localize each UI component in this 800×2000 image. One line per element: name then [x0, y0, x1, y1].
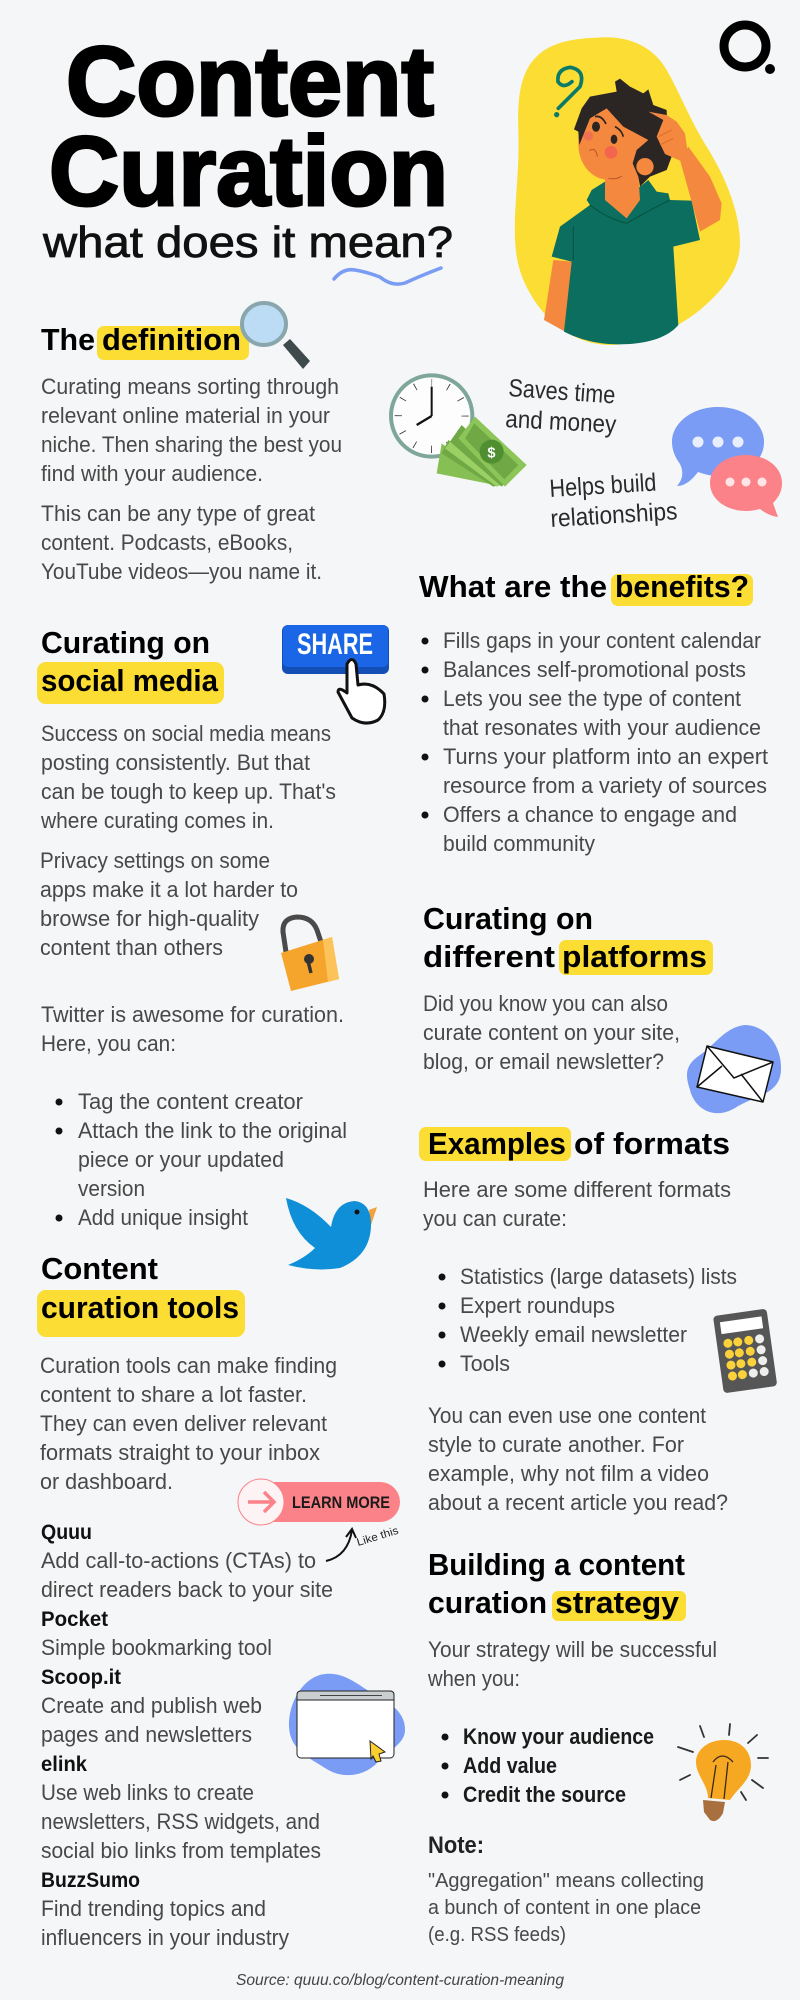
- list: benefits: Turns your platform into an expert: [443, 744, 768, 769]
- heading: curation tools: Content: [41, 1251, 158, 1286]
- text block: privacy: apps make it a lot harder to: [40, 877, 298, 902]
- heading: curation tools: [37, 1251, 245, 1337]
- text block: twitter: Here, you can:: [41, 1031, 176, 1056]
- text block: platforms: [423, 991, 680, 1074]
- heading: social media: social media: [41, 663, 219, 698]
- list: tools: social bio links from templates: [41, 1838, 321, 1863]
- list: strategy: [442, 1724, 654, 1807]
- heading: benefits: [419, 569, 753, 606]
- text block: definition: content. Podcasts, eBooks,: [41, 530, 293, 555]
- heading: strategy: strategy: [555, 1585, 680, 1620]
- list: tools: elink: [41, 1753, 87, 1776]
- text block: platforms: curate content on your site,: [423, 1020, 680, 1045]
- icon: light bulb: [678, 1724, 768, 1821]
- heading: examples: Examples: [428, 1126, 566, 1161]
- subtitle: what does it mean?: [42, 218, 453, 267]
- list: formats: [438, 1264, 737, 1376]
- text block: curation tools intro: content to share a lot faster.: [40, 1382, 307, 1407]
- list: tools: direct readers back to your site: [41, 1577, 333, 1602]
- text block: twitter: [41, 1002, 344, 1056]
- list: tools: Simple bookmarking tool: [41, 1635, 272, 1660]
- icon: padlock: [281, 917, 339, 991]
- text block: privacy: [40, 848, 298, 960]
- text block: formats intro: [423, 1177, 731, 1231]
- list: tools: Add call-to-actions (CTAs) to: [41, 1548, 316, 1573]
- icon: clock and money: $: [487, 445, 495, 461]
- heading: strategy: [428, 1547, 686, 1621]
- heading: benefits: What are the: [419, 569, 607, 604]
- text block: formats outro: style to curate another. For: [428, 1432, 684, 1457]
- heading: curation tools: curation tools: [41, 1290, 239, 1325]
- icon: bird: [286, 1198, 377, 1269]
- source footer: Source: quuu.co/blog/content-curation-meaning: [236, 1972, 564, 1989]
- list: tools: influencers in your industry: [41, 1925, 289, 1950]
- text block: strategy intro: when you:: [427, 1666, 520, 1691]
- text block: curation tools intro: or dashboard.: [40, 1469, 173, 1494]
- benefit label: helps build relationships: relationships: [550, 497, 678, 533]
- text block: definition: find with your audience.: [41, 461, 263, 486]
- panel: definition: [41, 303, 342, 584]
- list: twitter: version: [78, 1176, 145, 1201]
- text block: privacy: content than others: [40, 935, 223, 960]
- title: Curation: [49, 116, 448, 226]
- text block: definition: relevant online material in your: [41, 403, 330, 428]
- panel: benefits: [419, 569, 768, 856]
- note: "Aggregation" means collecting: [428, 1870, 704, 1892]
- heading: platforms: platforms: [562, 939, 707, 974]
- text block: formats outro: example, why not film a video: [428, 1461, 709, 1486]
- text block: formats intro: Here are some different formats: [423, 1177, 731, 1202]
- list: strategy: Credit the source: [463, 1782, 626, 1807]
- text block: social media: can be tough to keep up. That's: [41, 779, 336, 804]
- list: benefits: resource from a variety of sources: [443, 773, 767, 798]
- list: tools: Use web links to create: [41, 1780, 254, 1805]
- note: [428, 1832, 704, 1946]
- button: learn more: LEARN MORE: [292, 1493, 390, 1512]
- heading: benefits: benefits?: [615, 569, 749, 604]
- note: (e.g. RSS feeds): [428, 1924, 566, 1946]
- list: formats: Expert roundups: [460, 1293, 615, 1318]
- heading: platforms: different: [423, 939, 555, 974]
- list: tools: pages and newsletters: [41, 1722, 252, 1747]
- icon: magnifying glass: [242, 303, 310, 369]
- heading: strategy: Building a content: [428, 1547, 685, 1582]
- text block: privacy: browse for high-quality: [40, 906, 259, 931]
- benefit label: helps build relationships: [549, 469, 678, 533]
- illustration: confused person: [515, 37, 740, 345]
- icon: clock and money: [391, 375, 527, 487]
- title: [49, 26, 448, 226]
- list: tools: Find trending topics and: [41, 1896, 266, 1921]
- text block: definition: niche. Then sharing the best you: [41, 432, 342, 457]
- text block: formats intro: you can curate:: [423, 1206, 567, 1231]
- icon: share button: [282, 625, 389, 723]
- list: tools: Pocket: [41, 1608, 108, 1631]
- text block: curation tools intro: They can even deliver relevant: [40, 1411, 327, 1436]
- text block: platforms: blog, or email newsletter?: [423, 1049, 664, 1074]
- text block: social media: where curating comes in.: [40, 808, 274, 833]
- list: benefits: Offers a chance to engage and: [443, 802, 737, 827]
- heading: social media: Curating on: [41, 625, 210, 660]
- benefit label: saves time and money: and money: [505, 405, 617, 439]
- benefit label: saves time and money: Saves time: [508, 374, 616, 409]
- heading: the definition: definition: [102, 322, 241, 357]
- icon: envelope: [687, 1025, 781, 1113]
- text block: curation tools intro: Curation tools can make finding: [40, 1353, 337, 1378]
- heading: platforms: Curating on: [423, 901, 593, 936]
- list: twitter: Attach the link to the original: [78, 1118, 347, 1143]
- list: twitter: Tag the content creator: [78, 1089, 303, 1114]
- list: strategy: Add value: [463, 1753, 557, 1778]
- list: formats: Weekly email newsletter: [460, 1322, 687, 1347]
- heading: social media: [37, 625, 224, 704]
- benefit label: saves time and money: [505, 374, 617, 439]
- heading: the definition: [41, 322, 249, 360]
- subtitle: [42, 218, 453, 284]
- text block: formats outro: You can even use one content: [428, 1403, 706, 1428]
- arrow: like this: Like this: [355, 1525, 401, 1549]
- text block: privacy: Privacy settings on some: [40, 848, 270, 873]
- list: formats: Statistics (large datasets) lists: [460, 1264, 737, 1289]
- text block: strategy intro: Your strategy will be successful: [428, 1637, 717, 1662]
- heading: examples: [419, 1126, 730, 1161]
- text block: strategy intro: [427, 1637, 717, 1691]
- icon: chat bubbles: [672, 407, 782, 517]
- list: tools: BuzzSumo: [41, 1869, 140, 1892]
- panel: curating on social media: [37, 625, 389, 1269]
- list: formats: Tools: [460, 1351, 510, 1376]
- arrow: like this: [326, 1525, 401, 1561]
- text block: definition: This can be any type of great: [41, 501, 315, 526]
- list: benefits: build community: [443, 831, 595, 856]
- logo: [724, 25, 775, 74]
- list: tools: newsletters, RSS widgets, and: [41, 1809, 320, 1834]
- text block: social media: [40, 721, 336, 833]
- list: strategy: Know your audience: [463, 1724, 654, 1749]
- title: Content: [66, 26, 434, 136]
- text block: platforms: Did you know you can also: [423, 991, 668, 1016]
- text block: formats outro: [428, 1403, 728, 1515]
- panel: curation tools: [37, 1251, 405, 1950]
- note: a bunch of content in one place: [428, 1897, 701, 1919]
- list: benefits: Balances self-promotional posts: [443, 657, 746, 682]
- text block: definition: YouTube videos—you name it.: [41, 559, 322, 584]
- text block: formats outro: about a recent article you read?: [428, 1490, 728, 1515]
- list: tools: Scoop.it: [41, 1666, 121, 1689]
- heading: strategy: curation: [428, 1585, 547, 1620]
- panel: strategy: [427, 1547, 768, 1946]
- text block: curation tools intro: formats straight to your inbox: [40, 1440, 320, 1465]
- list: benefits: Fills gaps in your content calendar: [443, 628, 761, 653]
- panel: examples of formats: [419, 1126, 777, 1515]
- list: twitter: Add unique insight: [78, 1205, 248, 1230]
- list: twitter: piece or your updated: [78, 1147, 284, 1172]
- icon: share button: SHARE: [297, 628, 373, 661]
- list: tools: Quuu: [41, 1521, 92, 1544]
- button: learn more: [238, 1479, 400, 1525]
- text block: curation tools intro: [40, 1353, 337, 1494]
- text block: social media: Success on social media means: [41, 721, 331, 746]
- text block: definition: Curating means sorting through: [41, 374, 339, 399]
- list: twitter: [56, 1089, 347, 1230]
- heading: the definition: The: [41, 322, 95, 357]
- list: tools: [41, 1521, 333, 1950]
- text block: definition: [41, 374, 342, 584]
- note: Note:: [428, 1832, 484, 1859]
- text block: twitter: Twitter is awesome for curation.: [41, 1002, 344, 1027]
- icon: calculator: [713, 1309, 777, 1393]
- list: tools: Create and publish web: [41, 1693, 262, 1718]
- list: benefits: that resonates with your audience: [443, 715, 761, 740]
- heading: platforms: [423, 901, 713, 975]
- heading: examples: of formats: [574, 1126, 730, 1161]
- list: benefits: [422, 628, 768, 856]
- icon: browser window: [289, 1674, 405, 1775]
- panel: different platforms: [423, 901, 781, 1113]
- list: benefits: Lets you see the type of content: [443, 686, 741, 711]
- text block: social media: posting consistently. But that: [41, 750, 310, 775]
- benefit label: helps build relationships: Helps build: [549, 469, 657, 503]
